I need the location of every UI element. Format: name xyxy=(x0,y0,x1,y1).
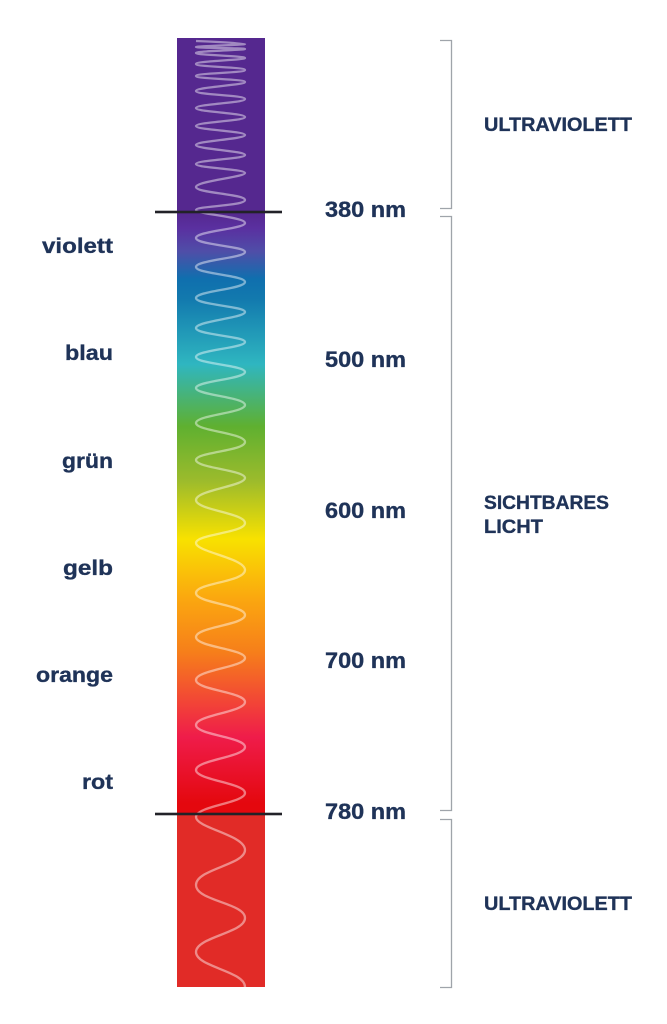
label: rot: rot xyxy=(82,770,113,794)
label: 780 nm: 780 nm xyxy=(325,799,406,824)
range label: visible light: LICHT xyxy=(484,517,543,538)
label: 700 nm: 700 nm xyxy=(325,648,406,673)
spectrum bar xyxy=(177,38,265,987)
label: orange: orange xyxy=(36,663,113,687)
wave line xyxy=(196,41,245,987)
bracket: upper ultraviolet xyxy=(440,40,452,208)
range label: lower ultraviolet: ULTRAVIOLETT xyxy=(484,894,632,915)
780 nm marker line xyxy=(155,813,282,815)
range label: visible light: SICHTBARES xyxy=(484,493,609,514)
visible and ultraviolet gradient section xyxy=(177,38,265,815)
380 nm marker line xyxy=(155,211,282,213)
label: grün: grün xyxy=(62,449,113,473)
label: gelb: gelb xyxy=(63,556,113,580)
range label: visible light xyxy=(484,493,609,538)
label: 600 nm: 600 nm xyxy=(325,498,406,523)
label: 380 nm: 380 nm xyxy=(325,197,406,222)
infrared solid red section xyxy=(177,814,265,987)
label: violett: violett xyxy=(42,234,113,258)
colour names xyxy=(36,234,113,794)
wavelength labels xyxy=(325,197,406,824)
label: 500 nm: 500 nm xyxy=(325,347,406,372)
bracket: visible light xyxy=(440,216,452,810)
label: blau: blau xyxy=(65,341,113,365)
range label: upper ultraviolet: ULTRAVIOLETT xyxy=(484,115,632,136)
bracket: lower ultraviolet xyxy=(440,820,452,988)
